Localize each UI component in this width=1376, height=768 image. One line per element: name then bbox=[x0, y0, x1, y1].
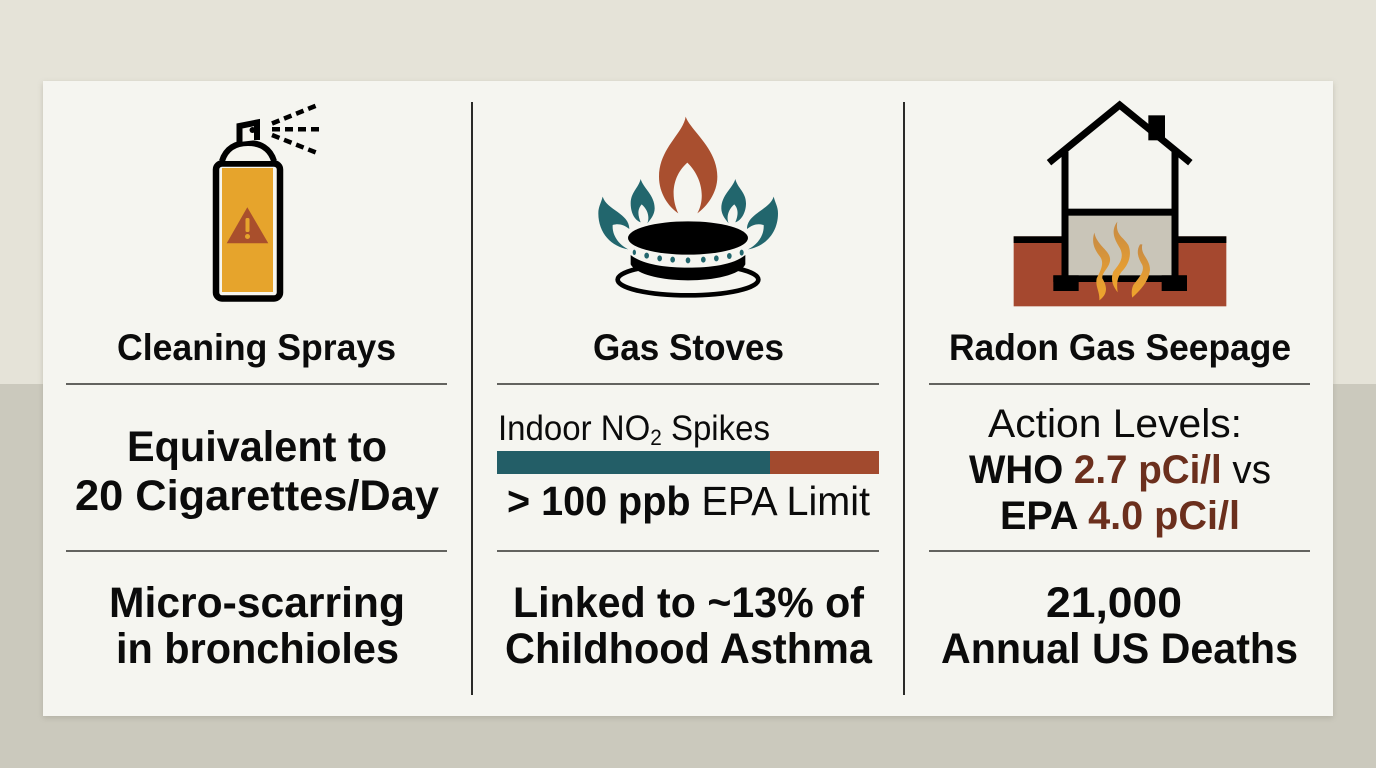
burner port band bbox=[631, 245, 745, 269]
panel: main card bbox=[43, 81, 1333, 716]
heading: cleaning sprays: Cleaning Sprays bbox=[117, 327, 396, 368]
text: asthma link bbox=[505, 579, 873, 673]
stat: cigarettes equivalent: Equivalent to bbox=[127, 423, 387, 471]
stat: action levels bbox=[969, 402, 1271, 538]
column: cleaning sprays bbox=[75, 106, 439, 673]
text: asthma link: Linked to ~13% of bbox=[513, 579, 865, 627]
burner lower body bbox=[631, 255, 745, 280]
column: radon gas bbox=[941, 105, 1298, 673]
column: gas stoves bbox=[497, 117, 879, 673]
burner ring bbox=[618, 264, 758, 295]
chart: indoor NO2 bar bbox=[497, 409, 879, 524]
label: EPA limit: > 100 ppb EPA Limit bbox=[507, 478, 871, 524]
text: asthma link: Childhood Asthma bbox=[505, 625, 873, 673]
icon: spray can bbox=[216, 106, 320, 298]
text: health effect: Micro-scarring bbox=[109, 579, 405, 627]
text: annual deaths: Annual US Deaths bbox=[941, 625, 1298, 673]
icon: house with radon seepage bbox=[1014, 105, 1226, 306]
text: health effect: in bronchioles bbox=[116, 625, 399, 673]
stat: action levels: WHO 2.7 pCi/l vs bbox=[969, 448, 1271, 492]
label: indoor NO2 spikes: Spikes bbox=[662, 409, 770, 448]
text: annual deaths: 21,000 bbox=[1046, 579, 1182, 627]
stat: cigarettes equivalent bbox=[75, 423, 439, 520]
label: indoor NO2 spikes: 2 bbox=[650, 425, 662, 450]
stat: action levels: Action Levels: bbox=[988, 402, 1242, 446]
stat: action levels: EPA 4.0 pCi/l bbox=[1000, 494, 1240, 538]
icon: gas burner bbox=[598, 117, 778, 295]
text: annual deaths bbox=[941, 579, 1298, 673]
stat: cigarettes equivalent: 20 Cigarettes/Day bbox=[75, 472, 439, 520]
heading: gas stoves: Gas Stoves bbox=[593, 327, 784, 368]
label: indoor NO2 spikes: Indoor NO bbox=[498, 409, 659, 448]
icon: warning triangle bbox=[227, 207, 268, 243]
heading: radon gas seepage: Radon Gas Seepage bbox=[949, 327, 1291, 368]
text: health effect bbox=[109, 579, 405, 673]
